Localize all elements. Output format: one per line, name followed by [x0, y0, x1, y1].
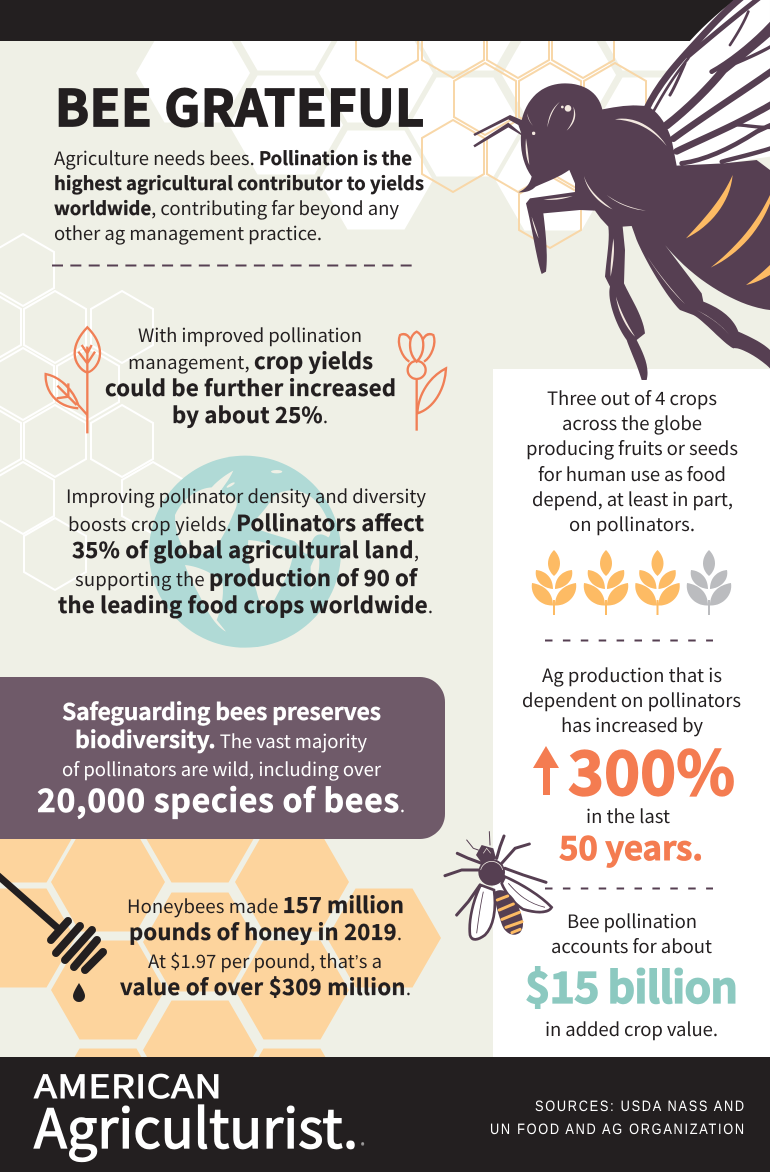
sources — [490, 1098, 744, 1138]
intro text: Agriculture needs bees. Pollination is the — [54, 145, 412, 171]
honeycomb background — [0, 784, 441, 1148]
sources: UN FOOD AND AG ORGANIZATION — [490, 1121, 744, 1138]
logo: ® — [361, 1141, 365, 1151]
text: pollinator density: the leading food crops worldwide. — [58, 588, 433, 620]
footer — [0, 1057, 770, 1172]
text: three out of four crops: across the globe — [562, 410, 702, 436]
bee wings — [646, 0, 770, 166]
icon: wheat row — [532, 550, 731, 615]
panel: biodiversity banner — [0, 677, 445, 839]
bee body — [473, 83, 770, 380]
arrow up — [533, 746, 559, 795]
text: three out of four crops: for human use as food — [538, 461, 726, 487]
panel: biodiversity banner: Safeguarding bees preserves — [62, 693, 381, 727]
text: crop yields — [105, 322, 396, 430]
text: three out of four crops — [526, 385, 738, 537]
wheat 2 — [584, 550, 628, 615]
text: crop yields: management, crop yields — [128, 344, 373, 376]
icon: large bee — [473, 0, 770, 380]
text: pollinator density: 35% of global agricultural land, — [72, 533, 419, 565]
text: three out of four crops: on pollinators. — [569, 511, 695, 537]
text: ag production: has increased by — [561, 712, 703, 738]
logo: AMERICAN — [34, 1062, 222, 1108]
wheat 3 — [635, 550, 680, 615]
text: pollinator density: Improving pollinator density and diversity — [66, 483, 426, 509]
text: bee pollination — [551, 908, 712, 959]
bee highlights — [526, 102, 729, 337]
icon: flower — [399, 332, 446, 431]
logo: Agriculturist. — [34, 1085, 358, 1164]
text: bee pollination: Bee pollination — [567, 908, 697, 934]
panel: biodiversity banner: of pollinators are wild, including over — [62, 756, 382, 782]
text: added crop value: in added crop value. — [545, 1016, 718, 1042]
icon: globe — [149, 456, 341, 648]
text: three out of four crops: Three out of 4 crops — [547, 385, 717, 411]
text: honey value: pounds of honey in 2019. — [129, 915, 402, 947]
intro text: highest agricultural contributor to yields — [54, 170, 424, 196]
text: three out of four crops: producing fruits or seeds — [526, 435, 738, 461]
text: pollinator density: supporting the production of 90 of — [75, 561, 418, 593]
text: pollinator density — [58, 483, 433, 620]
wheat 1 — [532, 550, 576, 615]
text: three out of four crops: depend, at least in part, — [532, 486, 733, 512]
text: honey value: value of over $309 million. — [120, 970, 411, 1002]
text: crop yields: With improved pollination — [138, 322, 362, 348]
title: BEE GRATEFUL — [55, 69, 424, 141]
panel: biodiversity banner: 20,000 species of bees. — [37, 776, 405, 822]
text: honey value: Honeybees made 157 million — [127, 888, 404, 920]
panel: biodiversity banner: biodiversity. The vast majority — [75, 721, 367, 755]
stat: 300%: 300% — [568, 724, 735, 813]
text: pollinator density: boosts crop yields. Pollinators affect — [68, 506, 424, 538]
icon: leaf plant — [46, 327, 100, 433]
sources: SOURCES: USDA NASS AND — [535, 1098, 744, 1115]
stat: 15 billion: $15 billion — [525, 954, 738, 1016]
text: bee pollination: accounts for about — [551, 933, 712, 959]
text: ag production: Ag production that is — [542, 662, 722, 688]
intro text — [54, 145, 424, 246]
text: ag production: dependent on pollinators — [522, 687, 741, 713]
stat: 50 years: 50 years. — [559, 822, 703, 870]
intro text: worldwide, contributing far beyond any — [54, 195, 399, 221]
text: crop yields: could be further increased — [105, 371, 396, 403]
text: crop yields: by about 25%. — [172, 398, 328, 430]
bee stripes — [686, 175, 770, 285]
icon: small bee — [445, 832, 552, 939]
top bar — [0, 0, 770, 41]
text: honey value — [120, 888, 411, 1002]
panel: right statistics background — [493, 369, 770, 1057]
icon: honey dipper — [0, 873, 103, 1002]
text: honey value: At $1.97 per pound, that’s a — [148, 948, 382, 974]
text: in the last: in the last — [586, 803, 670, 829]
text: ag production — [522, 662, 741, 738]
wheat 4 grey — [687, 550, 731, 615]
intro text: other ag management practice. — [54, 220, 322, 246]
